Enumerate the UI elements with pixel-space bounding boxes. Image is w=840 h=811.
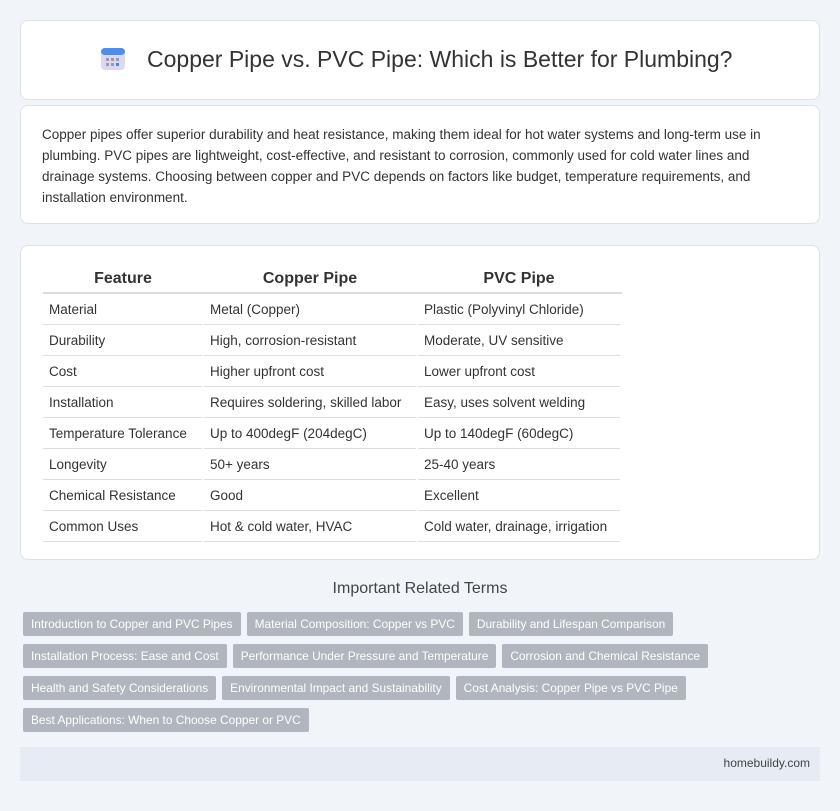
related terms tags: Best Applications: When to Choose Copper or PVC — [31, 713, 301, 727]
table: Easy, uses solvent welding — [424, 394, 585, 410]
table: Cold water, drainage, irrigation — [424, 518, 607, 534]
table: 25-40 years — [424, 456, 495, 472]
table: 50+ years — [210, 456, 270, 472]
table: Installation — [49, 394, 114, 410]
table: Requires soldering, skilled labor — [210, 394, 401, 410]
related terms tags: Introduction to Copper and PVC Pipes — [31, 617, 233, 631]
related terms tags: Material Composition: Copper vs PVC — [255, 617, 455, 631]
table: Lower upfront cost — [424, 364, 535, 378]
related terms tags: Corrosion and Chemical Resistance — [510, 649, 700, 663]
related terms tags: Health and Safety Considerations — [31, 681, 208, 695]
footer: homebuildy.com — [724, 756, 810, 770]
intro text panel: Copper pipes offer superior durability and heat resistance, making them ideal for hot water systems and long-term use in plumbing. PVC pipes are lightweight, cost-effective, and resistant to corrosion, commonly used for cold water lines and drainage systems. Choosing between copper and PVC depends on factors like budget, temperature requirements, and installation environment. — [42, 127, 761, 205]
related terms tags: Environmental Impact and Sustainability — [230, 681, 442, 695]
related terms tags: Performance Under Pressure and Temperature — [241, 649, 488, 663]
related terms tags: Installation Process: Ease and Cost — [31, 649, 219, 663]
table: Higher upfront cost — [210, 364, 324, 378]
table: Moderate, UV sensitive — [424, 332, 564, 348]
table — [43, 270, 622, 542]
table: High, corrosion-resistant — [210, 332, 356, 348]
table: Good — [210, 488, 243, 502]
related terms tags: Cost Analysis: Copper Pipe vs PVC Pipe — [464, 681, 678, 695]
table: Excellent — [424, 488, 479, 502]
table: Hot & cold water, HVAC — [210, 518, 352, 534]
header panel — [20, 20, 820, 100]
related terms heading: Important Related Terms — [333, 580, 507, 597]
table: Material — [49, 302, 97, 316]
intro text panel — [20, 105, 820, 224]
table: Up to 140degF (60degC) — [424, 426, 573, 440]
table: Cost — [49, 364, 77, 378]
comparison table panel — [20, 245, 820, 560]
table: Common Uses — [49, 518, 138, 534]
footer — [20, 747, 820, 781]
table: Temperature Tolerance — [49, 426, 187, 440]
title: Copper Pipe vs. PVC Pipe: Which is Better for Plumbing? — [147, 46, 732, 72]
table: PVC Pipe — [483, 270, 555, 287]
table: Durability — [49, 332, 105, 348]
table: Feature — [94, 270, 152, 287]
table: Plastic (Polyvinyl Chloride) — [424, 302, 584, 316]
table: Copper Pipe — [263, 270, 357, 287]
table: Longevity — [49, 456, 107, 472]
table: Metal (Copper) — [210, 302, 300, 316]
related terms tags — [23, 612, 708, 732]
table: Up to 400degF (204degC) — [210, 426, 367, 440]
related terms tags: Durability and Lifespan Comparison — [477, 617, 665, 631]
table: Chemical Resistance — [49, 488, 176, 502]
icon: calendar — [101, 48, 125, 70]
